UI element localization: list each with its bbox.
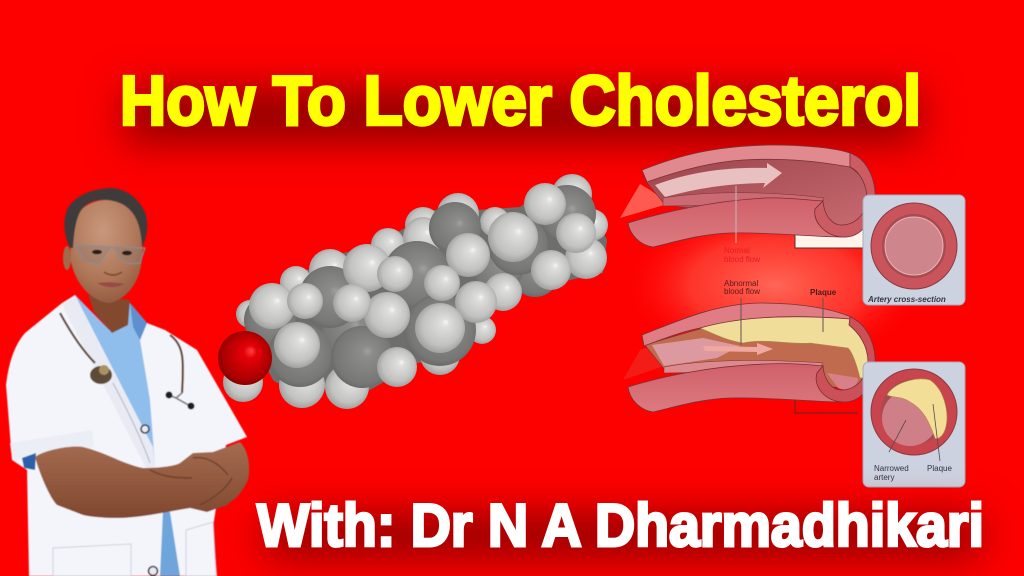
- arrow: abnormal blood flow: [703, 343, 773, 355]
- coat shading: [62, 295, 155, 468]
- label: blood flow second line: blood flow: [724, 255, 760, 264]
- labels: abnormal blood flow and plaque: blood flow: [724, 287, 760, 296]
- neck: [88, 295, 130, 333]
- top wall strip: [642, 145, 850, 182]
- background glow behind artery diagrams: [620, 200, 930, 370]
- plaque: [887, 379, 947, 439]
- labels: abnormal blood flow and plaque: [724, 279, 837, 297]
- molecule: cholesterol space-filling model: [218, 174, 608, 409]
- stethoscope: [60, 313, 183, 393]
- arrow: normal blood flow: [655, 163, 782, 197]
- pointer line: [735, 186, 737, 243]
- connector box behind artery: [795, 225, 863, 248]
- blood channel: [652, 338, 740, 366]
- panel: narrowed artery cross-section: Narrowed: [874, 464, 909, 473]
- connector line: [795, 400, 858, 413]
- glasses: [75, 245, 145, 264]
- presenter name: With: Dr N A Dharmadhikari: [257, 492, 984, 559]
- eyes, nose and mouth: [92, 250, 102, 254]
- lumen back wall: [645, 318, 869, 390]
- shirt: [75, 295, 155, 466]
- coat: [6, 295, 247, 576]
- blood stream tail: [620, 184, 664, 218]
- forearms: [35, 442, 249, 518]
- panel: narrowed artery cross-section: artery: [874, 473, 894, 482]
- inner lower wall: [663, 193, 824, 206]
- labels: abnormal blood flow and plaque: Plaque: [810, 288, 837, 297]
- hair: [64, 188, 147, 248]
- labels: abnormal blood flow and plaque: Abnormal: [724, 279, 758, 288]
- cut end ring: [815, 153, 875, 237]
- plaque deposit: [700, 317, 869, 378]
- panel: narrowed artery cross-section: Plaque: [927, 464, 952, 473]
- front wall: [628, 364, 843, 412]
- lumen back wall: [645, 158, 868, 227]
- artery diagram: normal artery: [620, 145, 875, 255]
- coat buttons: [141, 425, 149, 433]
- front wall: [628, 198, 843, 247]
- artery diagram: narrowed artery with plaque: [623, 298, 875, 413]
- blood stream tail: [623, 346, 664, 380]
- panel: narrowed artery cross-section: [863, 362, 965, 487]
- ear: [63, 246, 71, 270]
- panel: artery cross-section: [863, 195, 965, 305]
- panel: artery cross-section: Artery cross-section: [867, 295, 946, 304]
- inner lower wall: [664, 360, 823, 373]
- title: How To Lower Cholesterol: [120, 62, 921, 140]
- lumen opening: [827, 373, 858, 390]
- cut end ring: [816, 317, 875, 402]
- top wall strip: [642, 303, 851, 346]
- label: normal blood flow: Normal: [724, 246, 750, 255]
- photo: doctor in white coat: [6, 188, 249, 576]
- pointer lines: [741, 298, 823, 345]
- head: [70, 200, 143, 303]
